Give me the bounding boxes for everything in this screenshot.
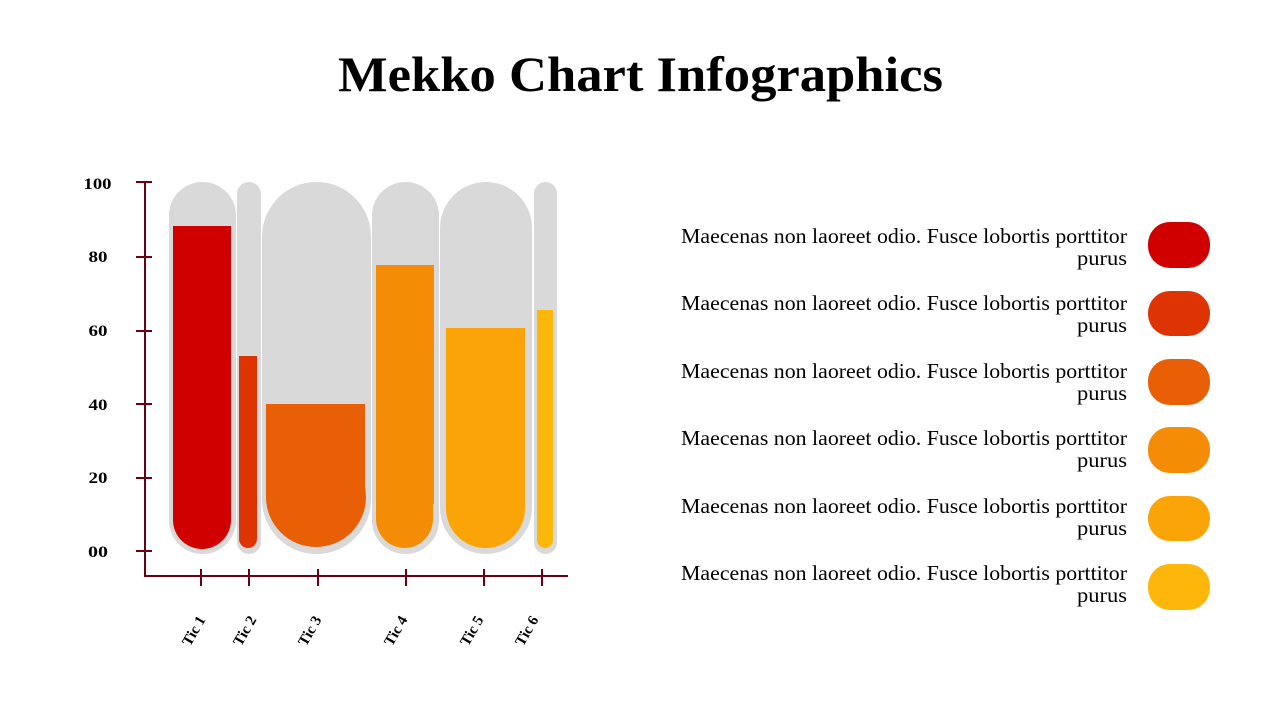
bar 4 background: [372, 182, 439, 554]
bar 1 background: [169, 182, 236, 554]
x axis: [144, 569, 568, 586]
y axis labels: 20: [88, 470, 108, 487]
y axis labels: [84, 176, 112, 561]
x axis labels: Tic 3: [296, 613, 325, 649]
legend row 3: [681, 359, 1210, 405]
x axis labels: Tic 2: [231, 613, 260, 649]
bar 6 background: [534, 182, 557, 554]
legend row 1: purus: [1077, 246, 1127, 270]
legend row 2: purus: [1077, 313, 1127, 337]
legend row 2: Maecenas non laoreet odio. Fusce lobortis porttitor: [681, 291, 1127, 315]
bar 4 fill: [376, 265, 434, 548]
y axis labels: 60: [88, 323, 108, 340]
title: Mekko Chart Infographics: [338, 46, 943, 102]
legend row 6: [681, 561, 1210, 610]
x axis labels: Tic 1: [180, 613, 209, 649]
mekko chart: [84, 176, 568, 649]
bar 2 background: [237, 182, 261, 554]
legend row 6: purus: [1077, 583, 1127, 607]
y axis labels: 40: [88, 397, 108, 414]
legend row 5: [681, 494, 1210, 541]
bar 2 fill: [239, 356, 257, 548]
bar 6 fill: [537, 310, 553, 548]
y axis: [136, 182, 152, 577]
legend row 5: Maecenas non laoreet odio. Fusce lobortis porttitor: [681, 494, 1127, 518]
x axis labels: Tic 6: [513, 613, 543, 649]
legend row 1: Maecenas non laoreet odio. Fusce lobortis porttitor: [681, 224, 1127, 248]
bar 5 fill: [446, 328, 525, 548]
x axis labels: Tic 5: [458, 613, 487, 649]
legend row 5: purus: [1077, 516, 1127, 540]
x axis labels: [180, 613, 543, 649]
legend row 1: [681, 222, 1210, 270]
x axis labels: Tic 4: [382, 613, 412, 649]
legend row 4: purus: [1077, 448, 1127, 472]
bar 3 fill: [266, 404, 366, 547]
bar 3 background: [262, 182, 371, 554]
y axis labels: 00: [88, 544, 108, 561]
y axis labels: 80: [88, 249, 108, 266]
legend row 3: purus: [1077, 381, 1127, 405]
y axis labels: 100: [84, 176, 112, 193]
legend: [681, 222, 1210, 610]
bar 1 fill: [173, 226, 231, 549]
legend row 6: Maecenas non laoreet odio. Fusce lobortis porttitor: [681, 561, 1127, 585]
legend row 3: Maecenas non laoreet odio. Fusce lobortis porttitor: [681, 359, 1127, 383]
legend row 2: [681, 291, 1210, 337]
legend row 4: Maecenas non laoreet odio. Fusce lobortis porttitor: [681, 426, 1127, 450]
legend row 4: [681, 426, 1210, 473]
bar 5 background: [440, 182, 532, 554]
